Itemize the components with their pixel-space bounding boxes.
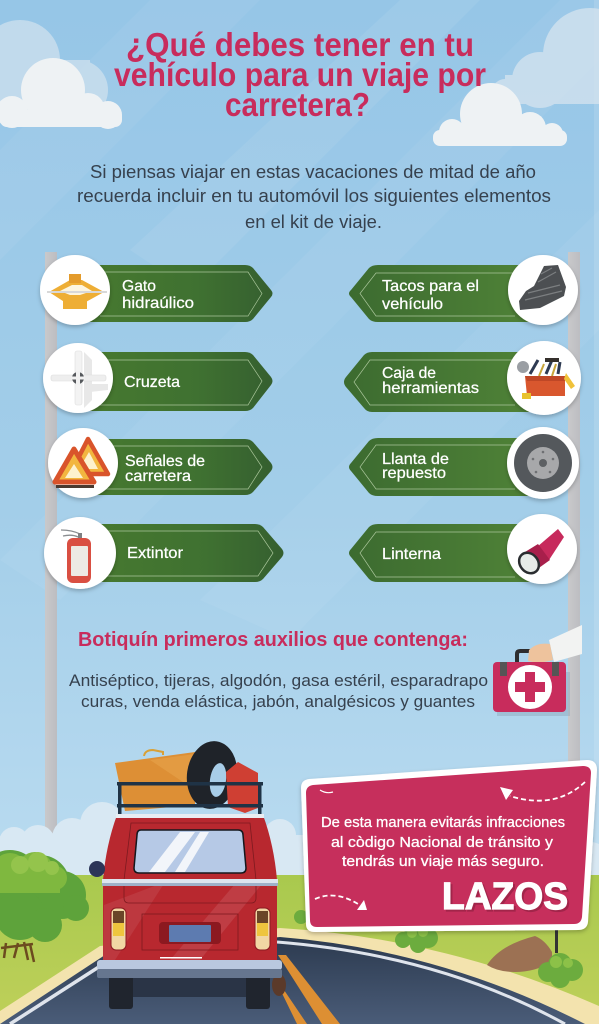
callout text: tendrás un viaje más seguro. (342, 853, 544, 870)
first aid contents text (69, 671, 488, 711)
sign: Tacos para el vehículo: vehículo (382, 296, 443, 313)
sign: Gato hidraúlico: Gato (122, 278, 156, 295)
intro text: recuerda incluir en tu automóvil los siguientes elementos (77, 186, 551, 206)
sign: Cruzeta: Cruzeta (124, 374, 180, 391)
sign: Caja de herramientas: herramientas (382, 380, 479, 397)
title (114, 26, 486, 123)
icon: flashlight (507, 514, 577, 584)
bumper (97, 957, 282, 978)
LAZOS logo: LAZOS (442, 876, 568, 918)
rear window (134, 830, 246, 873)
road (0, 937, 585, 1024)
chrome strip (102, 879, 278, 886)
sign: Señales de carretera (48, 428, 272, 498)
grass ground (0, 875, 599, 1024)
icon: warning triangles (48, 428, 118, 498)
left sign pole (45, 252, 57, 852)
clouds top left (0, 20, 122, 129)
sign: Señales de carretera: Señales de (125, 453, 205, 470)
title: ¿Qué debes tener en tu (126, 26, 474, 63)
van body (103, 815, 277, 960)
first aid heading: Botiquín primeros auxilios que contenga: (78, 629, 468, 651)
license plate (142, 914, 238, 950)
sign: Señales de carretera: carretera (125, 468, 191, 485)
LAZOS logo: LAZOS (444, 878, 570, 920)
icon: car jack (40, 255, 110, 325)
sign: Extintor (44, 517, 284, 589)
small roadside bush (395, 924, 438, 953)
sign: Extintor: Extintor (127, 545, 184, 562)
title: vehículo para un viaje por (114, 56, 486, 93)
clouds on the horizon (0, 802, 599, 882)
sign: Gato hidraúlico: hidraúlico (122, 295, 194, 312)
decorative dashed arrows (315, 782, 585, 910)
intro text: en el kit de viaje. (245, 212, 382, 232)
sign: Llanta de repuesto (349, 427, 579, 499)
spare tire on roof (183, 738, 241, 812)
bush near rock (538, 953, 583, 988)
right sign pole (568, 252, 580, 772)
sign: Llanta de repuesto: Llanta de (382, 451, 449, 468)
sign: Gato hidraúlico (40, 255, 272, 325)
icon: spare tire (507, 427, 579, 499)
callout text: al còdigo Nacional de tránsito y (331, 834, 554, 851)
callout text: De esta manera evitarás infracciones (321, 814, 565, 831)
icon: toolbox (507, 341, 581, 415)
callout post (555, 925, 558, 953)
sign: Caja de herramientas (344, 341, 581, 415)
icon: wheel chock (508, 255, 578, 325)
intro text (77, 162, 551, 232)
van with luggage (89, 738, 286, 1009)
sign: Cruzeta (43, 343, 272, 413)
icon: first aid kit held by hand (493, 625, 582, 716)
rear door outline (124, 823, 256, 903)
jerry can (226, 762, 258, 813)
sign: Tacos para el vehículo (349, 255, 578, 325)
title: carretera? (225, 86, 370, 123)
suitcase (115, 750, 195, 811)
clouds top right (433, 8, 599, 146)
icon: fire extinguisher (44, 517, 116, 589)
sign: Linterna (349, 514, 577, 584)
wheels and shadow (109, 974, 286, 1009)
callout panel (301, 760, 597, 932)
mirror (89, 861, 105, 877)
roof rack (117, 782, 263, 814)
sign: Llanta de repuesto: repuesto (382, 465, 446, 482)
callout text (321, 814, 565, 870)
road shoulder sand (0, 928, 599, 1024)
icon: lug wrench (43, 343, 113, 413)
sign: Tacos para el vehículo: Tacos para el (382, 278, 479, 295)
sign: Linterna: Linterna (382, 546, 441, 563)
sign: Caja de herramientas: Caja de (382, 365, 436, 382)
first aid contents text: curas, venda elástica, jabón, analgésicos y guantes (81, 692, 475, 711)
intro text: Si piensas viajar en estas vacaciones de mitad de año (90, 162, 536, 182)
bush left (0, 850, 89, 962)
first aid contents text: Antiséptico, tijeras, algodón, gasa estéril, esparadrapo (69, 671, 488, 690)
tail lights (111, 908, 270, 950)
rock (487, 936, 552, 972)
small bush behind callout (294, 910, 308, 924)
